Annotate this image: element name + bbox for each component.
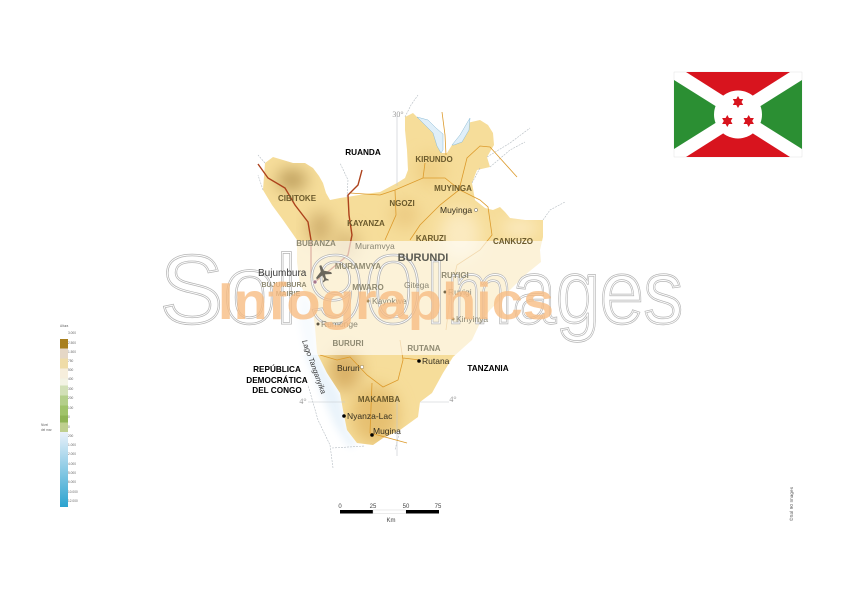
credit: ©Sol 90 Images [788,486,794,521]
legend: elevation and depth: 750 [68,359,74,363]
flag of Burundi [674,72,802,157]
province labels: BUBANZA [296,239,336,248]
land relief [263,113,543,445]
legend: elevation and depth: 0 [68,425,70,429]
province labels: MUYINGA [434,184,472,193]
city labels: Kayokwe [372,296,407,306]
neighbouring countries: REPÚBLICA [253,363,301,374]
legend: elevation and depth: 12.000 [68,499,78,503]
graticule [308,116,449,456]
city labels: Gitega [404,280,429,290]
legend: elevation and depth: Nivel [41,423,48,427]
translucent band [290,241,548,355]
province labels: RUYIGI [441,271,469,280]
city labels: Rumonge [321,319,358,329]
province labels: CANKUZO [493,237,533,246]
watermark: outlined: Sol [160,235,297,344]
province labels: KIRUNDO [415,155,453,164]
legend: elevation and depth: 300 [68,387,74,391]
province labels: CIBITOKE [278,194,317,203]
city labels: Kinyinya [456,314,488,324]
scale bar: 75 [435,504,442,510]
legend: elevation and depth: 1.500 [68,350,76,354]
legend: elevation and depth: 2.500 [68,341,76,345]
legend: elevation and depth: 1.000 [68,443,76,447]
legend: elevation and depth: del mar [41,428,53,432]
legend: elevation and depth: 0 [68,415,70,419]
legend: elevation and depth [41,324,78,507]
province labels: MWARO [352,283,384,292]
scale bar [338,504,442,524]
flag green triangles [674,80,802,149]
icon: airport plane [313,263,334,284]
scale bar: 25 [370,504,377,510]
watermark: outlined [160,235,683,344]
legend: elevation and depth: 2.000 [68,452,76,456]
province labels: MAKAMBA [358,395,400,404]
scale bar: 0 [338,504,342,510]
flag red triangles [686,72,790,157]
neighbouring countries: TANZANIA [467,364,509,373]
northern lakes [417,117,470,153]
legend: elevation and depth: 200 [68,396,74,400]
legend: elevation and depth: 4.000 [68,462,76,466]
city labels: Muramvya [355,241,395,251]
province labels: MURAMVYA [335,262,381,271]
legend: elevation and depth: 100 [68,406,74,410]
city labels: Bujumbura [258,268,307,279]
graticule labels: 30° [392,110,404,119]
legend: elevation and depth: 5.000 [68,471,76,475]
legend: elevation and depth: 10.000 [68,490,78,494]
scale bar: Km [386,518,396,524]
graticule labels: 4° [449,395,457,404]
city labels: Bururi [337,363,360,373]
legend: elevation and depth: Altura [60,324,69,328]
city labels: Rutana [422,356,450,366]
scale bar: 50 [403,504,410,510]
neighbouring countries: DEMOCRÁTICA [246,375,308,385]
province labels: BUJUMBURA [261,282,307,289]
border lines [258,95,565,468]
province labels: KAYANZA [347,219,385,228]
graticule labels: 4° [299,397,307,406]
map of Burundi [250,95,565,468]
watermark: outlined: 90 [307,235,422,344]
watermark: outlined: Images [425,243,683,343]
legend: elevation and depth: 400 [68,377,74,381]
orange roads [320,112,517,443]
city labels: Ruyigi [448,287,472,297]
flag stars [722,96,754,127]
neighbouring countries: DEL CONGO [252,386,302,395]
province labels: BURURI [332,339,364,348]
province labels [261,155,533,404]
graticule labels [299,110,457,406]
watermark: outlined: 90 [307,235,422,344]
country title: BURUNDI [398,252,448,264]
city labels: Mugina [373,426,401,436]
province labels: RUTANA [407,344,441,353]
legend: elevation and depth: 200 [68,434,74,438]
legend: elevation and depth: 3.000 [68,331,76,335]
neighbouring countries: RUANDA [345,148,381,157]
province labels: NGOZI [389,199,415,208]
legend: elevation and depth: 6.000 [68,480,76,484]
province labels: MAIRIE [276,291,301,298]
city labels: Muyinga [440,205,472,215]
lake and shore halo [299,285,357,448]
red main roads [258,164,362,281]
watermark: outlined: Images [425,243,683,343]
watermark: orange: Infographics [218,273,554,331]
city labels [258,205,488,437]
legend: elevation and depth: 500 [68,368,74,372]
lake label: Lago Tanganyika [300,339,328,395]
watermark: outlined: Sol [160,235,297,344]
province labels: KARUZI [416,234,446,243]
neighbouring countries [246,148,509,395]
city labels: Nyanza-Lac [347,411,393,421]
